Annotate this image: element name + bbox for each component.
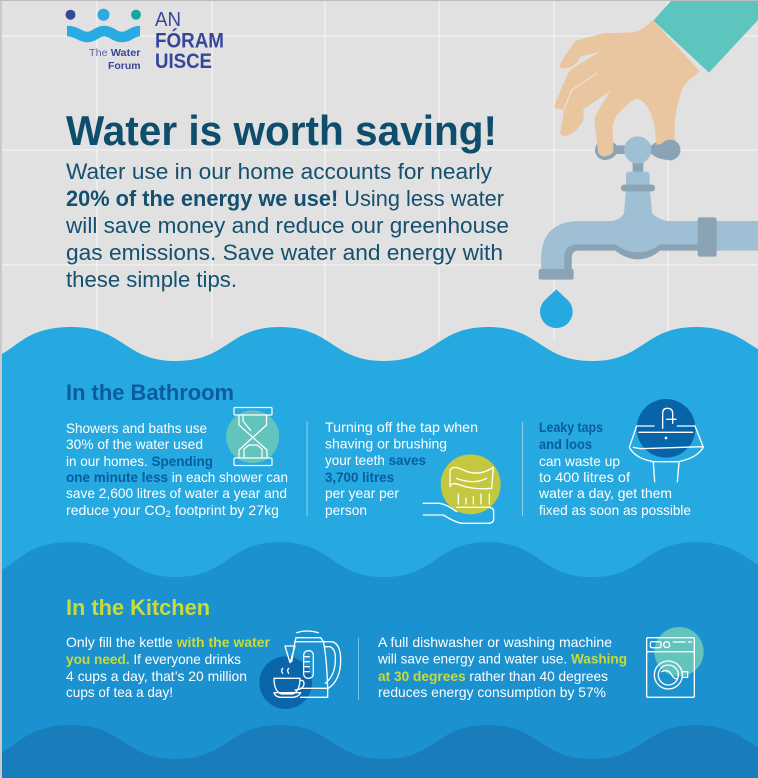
intro text: 20% of the energy we use! Using less water	[66, 186, 504, 211]
text: leaky taps tip: fixed as soon as possible	[539, 503, 691, 518]
text: tap off tip	[325, 420, 478, 518]
panel: bathroom background wave	[2, 327, 758, 778]
text: kettle tip	[66, 635, 271, 700]
icon: tap handle centre	[624, 136, 651, 164]
panel: in the bathroom	[66, 380, 703, 523]
text: kettle tip: you need. If everyone drinks	[66, 652, 241, 667]
text: kettle tip: Only fill the kettle with the water	[66, 635, 271, 650]
intro text: will save money and reduce our greenhouse	[65, 213, 509, 238]
text: washing machine tip: reduces energy consumption by 57%	[378, 685, 606, 700]
text: showers tip: reduce your CO	[66, 503, 162, 518]
text: kettle tip: 4 cups a day, that’s 20 million	[66, 669, 247, 684]
icon: tap stem	[633, 162, 643, 173]
logo: The Water Forum / An Fóram Uisce: FÓRAM	[155, 28, 224, 52]
intro text	[65, 159, 509, 292]
text: washing machine tip: will save energy and water use. Washing	[377, 652, 627, 666]
finger crease	[564, 73, 598, 109]
text: washing machine tip: A full dishwasher or washing machine	[378, 635, 612, 650]
title: Water is worth saving!	[66, 107, 497, 154]
icon: hand	[554, 20, 700, 157]
icon: tap flange	[698, 217, 717, 257]
text: washing machine tip: at 30 degrees rather than 40 degrees	[378, 669, 608, 684]
text: kettle tip: cups of tea a day!	[66, 685, 173, 700]
text: showers tip: 30% of the water used	[66, 437, 203, 452]
footer wave	[2, 725, 758, 778]
text: tap off tip: shaving or brushing	[325, 436, 447, 452]
panel: kitchen background wave	[2, 542, 758, 778]
icon: tap nozzle	[539, 269, 574, 280]
text: showers tip: 2	[166, 509, 171, 519]
icon: toothbrush	[423, 454, 501, 523]
text: showers tip: Showers and baths use	[66, 421, 207, 436]
heading: bathroom: In the Bathroom	[66, 380, 234, 405]
text: leaky taps tip: water a day, get them	[538, 486, 672, 501]
logo: The Water Forum / An Fóram Uisce: The Water	[89, 48, 141, 59]
text: showers tip: in our homes. Spending	[66, 454, 213, 469]
text: tap off tip: 3,700 litres	[325, 470, 394, 485]
icon: tap handle back	[595, 139, 680, 160]
icon: tap underside shadow	[564, 244, 700, 270]
icon: washing machine	[647, 627, 704, 697]
text: showers tip: save 2,600 litres of water a year and	[66, 486, 287, 501]
text: showers tip: one minute less in each shower can	[66, 470, 288, 485]
logo: The Water Forum / An Fóram Uisce: Forum	[108, 61, 141, 72]
text: tap off tip: your teeth saves	[325, 453, 426, 468]
icon: hourglass	[226, 408, 279, 466]
text: tap off tip: person	[325, 503, 367, 518]
icon: kettle and cup	[259, 631, 341, 709]
icon: tap cap	[626, 172, 650, 188]
text: showers tip: footprint by 27kg	[171, 503, 279, 518]
logo: The Water Forum / An Fóram Uisce: AN	[155, 9, 181, 31]
text: leaky taps tip: Leaky taps	[539, 420, 603, 435]
text: tap off tip: Turning off the tap when	[325, 420, 478, 435]
text: leaky taps tip: can waste up	[539, 454, 620, 469]
intro text: Water use in our home accounts for nearly	[66, 159, 492, 184]
panel: in the kitchen	[66, 595, 704, 709]
logo: The Water Forum / An Fóram Uisce: UISCE	[155, 50, 212, 73]
text: showers tip	[66, 421, 288, 519]
text: tap off tip: per year per	[325, 486, 399, 501]
text: leaky taps tip: and loos	[539, 437, 592, 452]
icon: tap body	[541, 190, 758, 272]
text: leaky taps tip	[538, 420, 691, 518]
intro text: these simple tips.	[66, 267, 237, 292]
sleeve	[653, 1, 758, 73]
icon: sink	[629, 399, 703, 482]
heading: kitchen: In the Kitchen	[66, 595, 210, 620]
illustration: hand turning dripping tap	[539, 1, 758, 328]
text: leaky taps tip: to 400 litres of	[539, 470, 630, 485]
icon: water drop	[540, 289, 573, 328]
icon: tap handle right knob	[660, 140, 680, 160]
intro text: gas emissions. Save water and energy with	[66, 240, 503, 265]
text: washing machine tip	[377, 635, 627, 700]
logo: The Water Forum / An Fóram Uisce	[66, 9, 224, 73]
icon: tap ring	[621, 185, 655, 191]
